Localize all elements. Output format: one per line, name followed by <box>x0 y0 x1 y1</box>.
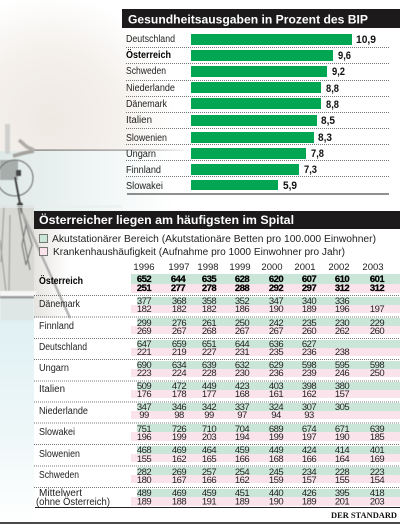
table values: 346 <box>172 402 186 413</box>
table values: 347 <box>269 296 283 307</box>
table row labels: Österreich <box>39 274 83 287</box>
table values: 262 <box>335 326 349 337</box>
table row labels: Dänemark <box>39 299 81 310</box>
table values: 342 <box>202 402 216 413</box>
table values: 307 <box>302 402 316 413</box>
table values: 639 <box>370 424 384 435</box>
country labels: Slowenien <box>126 133 167 144</box>
table row labels <box>36 274 110 508</box>
table values: 312 <box>370 283 384 294</box>
table values: 403 <box>269 381 283 392</box>
table values: 299 <box>137 318 151 329</box>
table values: 395 <box>335 488 349 499</box>
table values: 312 <box>335 283 349 294</box>
table values: 340 <box>302 296 316 307</box>
table values: 468 <box>137 445 151 456</box>
table values: 196 <box>137 432 151 443</box>
table row labels: (ohne Österreich) <box>36 496 110 508</box>
table values: 154 <box>370 475 384 486</box>
bar values: 8,3 <box>318 132 332 144</box>
legend: Akutstationärer Bereich (Akutstationäre Betten pro 100.000 Einwohner) <box>52 234 376 245</box>
bar values: 7,8 <box>311 148 324 160</box>
table values: 99 <box>204 410 214 421</box>
table values: 234 <box>302 467 316 478</box>
table row labels: Deutschland <box>39 342 87 353</box>
table values: 221 <box>137 347 151 358</box>
table values: 162 <box>302 389 316 400</box>
table row labels: Slowakei <box>39 427 75 438</box>
table row labels: Mittelwert <box>39 488 82 499</box>
table values: 652 <box>137 274 151 285</box>
source logo: Der Standard: DER STANDARD <box>331 511 397 520</box>
table values: 199 <box>269 432 283 443</box>
bar values: 8,8 <box>326 83 339 95</box>
year header: 1999 <box>229 262 251 273</box>
table values: 629 <box>269 360 283 371</box>
table values: 489 <box>137 488 151 499</box>
table values: 230 <box>335 318 349 329</box>
table values: 257 <box>202 467 216 478</box>
table values: 168 <box>235 389 249 400</box>
table values: 166 <box>302 454 316 465</box>
year header: 1998 <box>197 262 219 273</box>
table values: 440 <box>269 488 283 499</box>
table values: 636 <box>269 339 283 350</box>
table values: 245 <box>269 467 283 478</box>
table values: 250 <box>370 368 384 379</box>
bar values: 8,8 <box>326 99 339 111</box>
table values: 282 <box>137 467 151 478</box>
table values: 201 <box>335 496 349 508</box>
table values: 751 <box>137 424 151 435</box>
table values: 459 <box>202 488 216 499</box>
table values: 336 <box>335 296 349 307</box>
table values: 196 <box>335 304 349 315</box>
table row labels: Italien <box>39 384 65 395</box>
table values: 167 <box>172 475 186 486</box>
year header: 1996 <box>133 262 155 273</box>
table row labels: Schweden <box>39 470 79 481</box>
table values: 178 <box>172 389 186 400</box>
heading: Österreicher im Spital: Österreicher liegen am häufigsten im Spital <box>39 212 294 227</box>
table values: 459 <box>235 445 249 456</box>
table values: 651 <box>202 339 216 350</box>
table row labels: Ungarn <box>39 363 69 374</box>
table values: 277 <box>171 283 185 294</box>
green bars <box>191 34 352 190</box>
table values: 189 <box>302 496 316 508</box>
heading: Österreicher im Spital <box>34 211 400 229</box>
table values: 230 <box>235 368 249 379</box>
table values: 189 <box>137 496 151 508</box>
table values: 451 <box>235 488 249 499</box>
table values: 219 <box>172 347 186 358</box>
table values <box>137 274 385 508</box>
table values: 418 <box>370 488 384 499</box>
table values: 189 <box>235 496 249 508</box>
country labels: Italien <box>126 115 152 126</box>
table values: 155 <box>137 454 151 465</box>
table values: 197 <box>370 304 384 315</box>
table row labels: Finnland <box>39 321 74 332</box>
year header: 2002 <box>328 262 350 273</box>
table values: 182 <box>172 304 186 315</box>
table values: 358 <box>202 296 216 307</box>
table values: 177 <box>202 389 216 400</box>
table values: 190 <box>335 432 349 443</box>
table values: 324 <box>269 402 283 413</box>
table values: 269 <box>172 467 186 478</box>
country labels: Finnland <box>126 165 161 176</box>
table values: 628 <box>235 274 249 285</box>
table values: 157 <box>335 389 349 400</box>
table values: 239 <box>302 368 316 379</box>
bar values: 9,2 <box>332 66 345 78</box>
table values: 254 <box>235 467 249 478</box>
bar values: 7,3 <box>304 164 317 176</box>
table values: 464 <box>202 445 216 456</box>
table values: 224 <box>172 368 186 379</box>
table values: 157 <box>302 475 316 486</box>
table values: 644 <box>235 339 249 350</box>
table values: 414 <box>335 445 349 456</box>
table values: 164 <box>335 454 349 465</box>
table values: 228 <box>202 368 216 379</box>
table values: 305 <box>335 402 349 413</box>
table values: 99 <box>139 410 149 421</box>
table values: 449 <box>202 381 216 392</box>
table values: 223 <box>370 467 384 478</box>
table values: 368 <box>172 296 186 307</box>
country labels <box>126 34 175 192</box>
table values: 269 <box>137 326 151 337</box>
table values: 278 <box>202 283 216 294</box>
table values: 182 <box>137 304 151 315</box>
table values: 380 <box>335 381 349 392</box>
table values: 607 <box>302 274 316 285</box>
table row labels: Niederlande <box>39 406 88 417</box>
table values: 398 <box>302 381 316 392</box>
country labels: Schweden <box>126 66 166 77</box>
table values: 166 <box>202 475 216 486</box>
table values: 472 <box>172 381 186 392</box>
year header: 2001 <box>294 262 316 273</box>
heading: Gesundheitsausgaben: Gesundheitsausgaben in Prozent des BIP <box>128 12 368 26</box>
table values: 423 <box>235 381 249 392</box>
table values: 168 <box>269 454 283 465</box>
table values: 595 <box>335 360 349 371</box>
legend <box>40 234 376 258</box>
table values: 610 <box>335 274 349 285</box>
table values: 620 <box>269 274 283 285</box>
year header: 1997 <box>168 262 190 273</box>
table values: 644 <box>171 274 186 285</box>
table values: 377 <box>137 296 151 307</box>
bar values: 5,9 <box>283 180 297 192</box>
table values: 726 <box>172 424 186 435</box>
table values: 288 <box>235 283 249 294</box>
year header: 2003 <box>362 262 384 273</box>
table values: 162 <box>172 454 186 465</box>
table values: 231 <box>235 347 249 358</box>
table values: 635 <box>202 274 217 285</box>
table values: 267 <box>269 326 283 337</box>
table values: 509 <box>137 381 151 392</box>
table values: 235 <box>269 347 283 358</box>
table values: 424 <box>302 445 316 456</box>
table values: 189 <box>302 304 316 315</box>
country labels: Niederlande <box>126 83 175 94</box>
table values: 155 <box>335 475 349 486</box>
table values: 203 <box>370 496 384 508</box>
country labels: Slowakei <box>126 181 163 192</box>
table values: 260 <box>302 326 316 337</box>
table values: 162 <box>235 475 249 486</box>
legend: Krankenhaushäufigkeit (Aufnahme pro 1000 Einwohner pro Jahr) <box>53 247 345 258</box>
table values: 449 <box>269 445 283 456</box>
country labels: Ungarn <box>126 149 156 160</box>
table values: 251 <box>137 283 152 294</box>
table values: 180 <box>137 475 151 486</box>
table values: 690 <box>137 360 151 371</box>
table values: 710 <box>202 424 216 435</box>
table values: 236 <box>302 347 316 358</box>
table values: 242 <box>269 318 283 329</box>
table values: 186 <box>235 304 249 315</box>
table values: 337 <box>235 402 249 413</box>
table values: 227 <box>202 347 216 358</box>
table values: 223 <box>137 368 151 379</box>
table values: 236 <box>269 368 283 379</box>
table values: 260 <box>370 326 384 337</box>
table values: 401 <box>370 445 384 456</box>
table values: 176 <box>137 389 151 400</box>
table values: 161 <box>269 389 283 400</box>
table values: 97 <box>237 410 247 421</box>
table values: 98 <box>174 410 184 421</box>
row stripes: green and pink <box>131 274 400 506</box>
table values: 190 <box>269 304 283 315</box>
bar values <box>283 34 376 192</box>
table values: 632 <box>235 360 249 371</box>
table values: 203 <box>202 432 216 443</box>
bar values: 8,5 <box>321 115 335 127</box>
table values: 194 <box>235 432 249 443</box>
table values: 469 <box>172 488 186 499</box>
table values: 268 <box>202 326 216 337</box>
table values: 191 <box>202 496 216 508</box>
table values: 182 <box>202 304 216 315</box>
table values: 261 <box>202 318 216 329</box>
table values: 634 <box>172 360 186 371</box>
table values: 185 <box>370 432 384 443</box>
country labels: Dänemark <box>126 99 168 110</box>
country labels: Deutschland <box>126 34 175 45</box>
table values: 159 <box>269 475 283 486</box>
table values: 704 <box>235 424 249 435</box>
bar values: 9,6 <box>338 50 351 62</box>
panel: Österreicher im Spital table <box>34 211 400 508</box>
table values: 689 <box>269 424 283 435</box>
table values: 250 <box>235 318 249 329</box>
table values: 627 <box>302 339 316 350</box>
table values: 659 <box>172 339 186 350</box>
table values: 426 <box>302 488 316 499</box>
panel: Gesundheitsausgaben bar chart <box>122 9 400 194</box>
table values: 276 <box>172 318 186 329</box>
table row labels: Slowenien <box>39 449 80 460</box>
table values: 647 <box>137 339 151 350</box>
table values: 94 <box>271 410 281 421</box>
table values: 674 <box>302 424 316 435</box>
table values: 469 <box>172 445 186 456</box>
table values: 190 <box>269 496 283 508</box>
table values: 238 <box>335 347 349 358</box>
table values: 165 <box>202 454 216 465</box>
country labels: Österreich <box>126 48 171 61</box>
table values: 352 <box>235 296 249 307</box>
year header: 2000 <box>261 262 283 273</box>
table values: 267 <box>235 326 249 337</box>
table values: 347 <box>137 402 151 413</box>
table values: 671 <box>335 424 349 435</box>
table values: 229 <box>370 318 384 329</box>
table values: 188 <box>172 496 186 508</box>
table values: 246 <box>335 368 349 379</box>
table values: 601 <box>370 274 385 285</box>
bar values: 10,9 <box>356 34 376 46</box>
table values: 639 <box>202 360 216 371</box>
table values: 598 <box>370 360 384 371</box>
heading: Gesundheitsausgaben <box>122 9 400 28</box>
table values: 199 <box>172 432 186 443</box>
table values: 267 <box>172 326 186 337</box>
table values: 598 <box>302 360 316 371</box>
table values: 169 <box>370 454 384 465</box>
table values: 235 <box>302 318 316 329</box>
table values: 297 <box>302 283 316 294</box>
table values: 292 <box>269 283 283 294</box>
table values: 166 <box>235 454 249 465</box>
table values: 228 <box>335 467 349 478</box>
table values: 93 <box>304 410 314 421</box>
table values: 197 <box>302 432 316 443</box>
